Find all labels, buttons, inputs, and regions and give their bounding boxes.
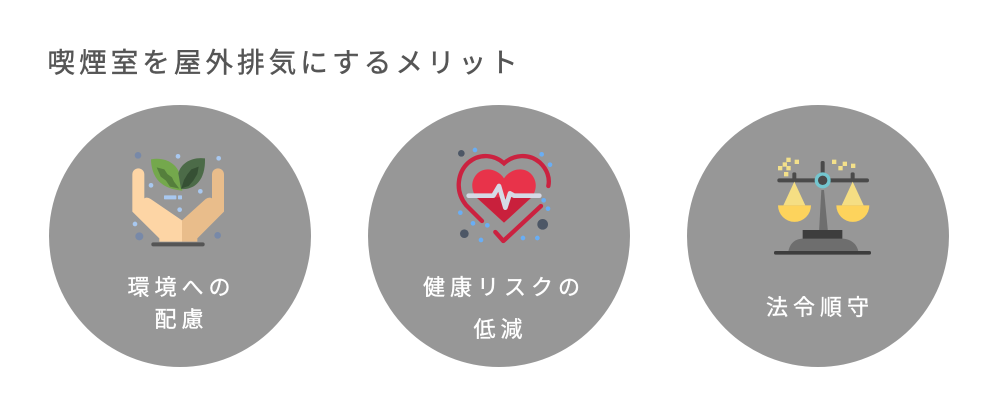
label: health: 健康リスクの xyxy=(423,275,585,300)
circle background: law xyxy=(687,105,949,367)
label: health line 2: 低減 xyxy=(474,317,528,342)
label: environment line 2: 配慮 xyxy=(154,307,209,332)
title: 喫煙室を屋外排気にするメリット xyxy=(48,47,522,78)
icon: scales xyxy=(774,158,871,255)
circle background: environment xyxy=(49,105,311,367)
circle background: health xyxy=(368,105,630,367)
icon: hands and leaves xyxy=(132,152,224,246)
panel: health xyxy=(368,105,630,367)
panel: law xyxy=(687,105,949,367)
icon: heart xyxy=(458,148,552,242)
panel: environment xyxy=(49,105,311,367)
label: environment: 環境への xyxy=(128,275,236,300)
label: law: 法令順守 xyxy=(766,295,874,320)
